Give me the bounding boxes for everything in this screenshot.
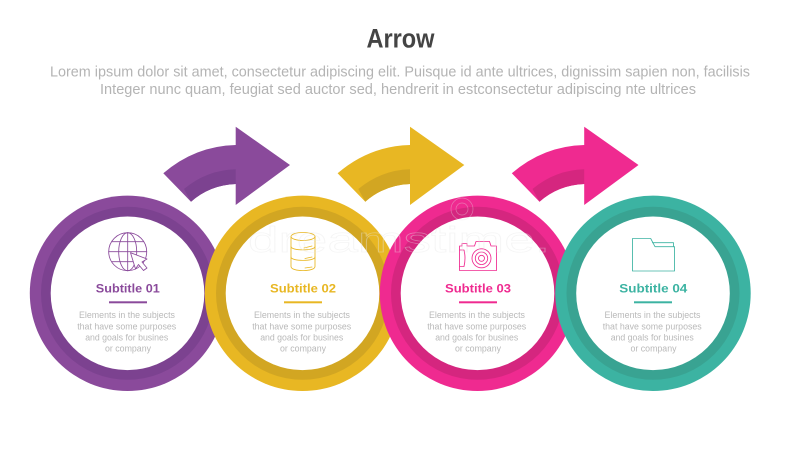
icon: folder	[632, 238, 674, 271]
description 02	[252, 310, 352, 354]
divider 02	[284, 301, 322, 303]
description 01: and goals for busines	[85, 332, 169, 342]
icon: camera	[460, 242, 496, 270]
icon: globe with cursor	[109, 233, 147, 271]
description 02: that have some purposes	[252, 321, 352, 331]
description 02: Elements in the subjects	[254, 310, 350, 320]
intro text: Lorem ipsum dolor sit amet, consectetur adipiscing elit. Puisque id ante ultrices, dignissim sapien non, facilisis	[50, 64, 750, 80]
divider 04	[634, 301, 672, 303]
panel: step 04	[555, 196, 751, 391]
divider 03	[459, 301, 497, 303]
icon: database	[291, 232, 315, 271]
description 03	[427, 310, 527, 354]
title: Arrow	[366, 23, 435, 53]
description 04: Elements in the subjects	[604, 310, 701, 320]
ring: pink	[380, 196, 575, 391]
description 02: and goals for busines	[260, 332, 344, 342]
subtitle 01: Subtitle 01	[96, 284, 160, 296]
description 01: that have some purposes	[77, 321, 177, 331]
description 04: or company	[630, 344, 677, 354]
watermark: dreamstime.	[248, 219, 550, 260]
description 04: that have some purposes	[603, 321, 702, 331]
arrow: gold	[338, 127, 464, 205]
intro text: Integer nunc quam, feugiat sed auctor sed, hendrerit in estconsectetur adipiscing nte ultrices	[100, 81, 696, 98]
subtitle 03: Subtitle 03	[445, 284, 511, 296]
description 04	[603, 310, 702, 354]
description 01: Elements in the subjects	[79, 310, 175, 320]
description 03: or company	[455, 344, 501, 354]
arrow: purple	[163, 127, 290, 205]
divider 01	[109, 301, 147, 303]
description 03: and goals for busines	[435, 332, 519, 342]
ring: purple	[30, 196, 225, 391]
description 03: that have some purposes	[427, 321, 527, 331]
description 02: or company	[280, 344, 326, 354]
intro text	[50, 64, 750, 98]
description 04: and goals for busines	[611, 332, 694, 342]
description 03: Elements in the subjects	[429, 310, 525, 320]
arrow: pink	[512, 127, 638, 205]
watermark	[248, 198, 550, 260]
ring: teal	[555, 196, 751, 391]
subtitle 02: Subtitle 02	[270, 284, 336, 296]
description 01: or company	[105, 344, 151, 354]
panel: step 03	[380, 196, 575, 391]
panel: step 02	[205, 196, 400, 391]
panel: step 01	[30, 196, 225, 391]
ring: gold	[205, 196, 400, 391]
description 01	[77, 310, 177, 354]
subtitle 04: Subtitle 04	[619, 284, 688, 296]
